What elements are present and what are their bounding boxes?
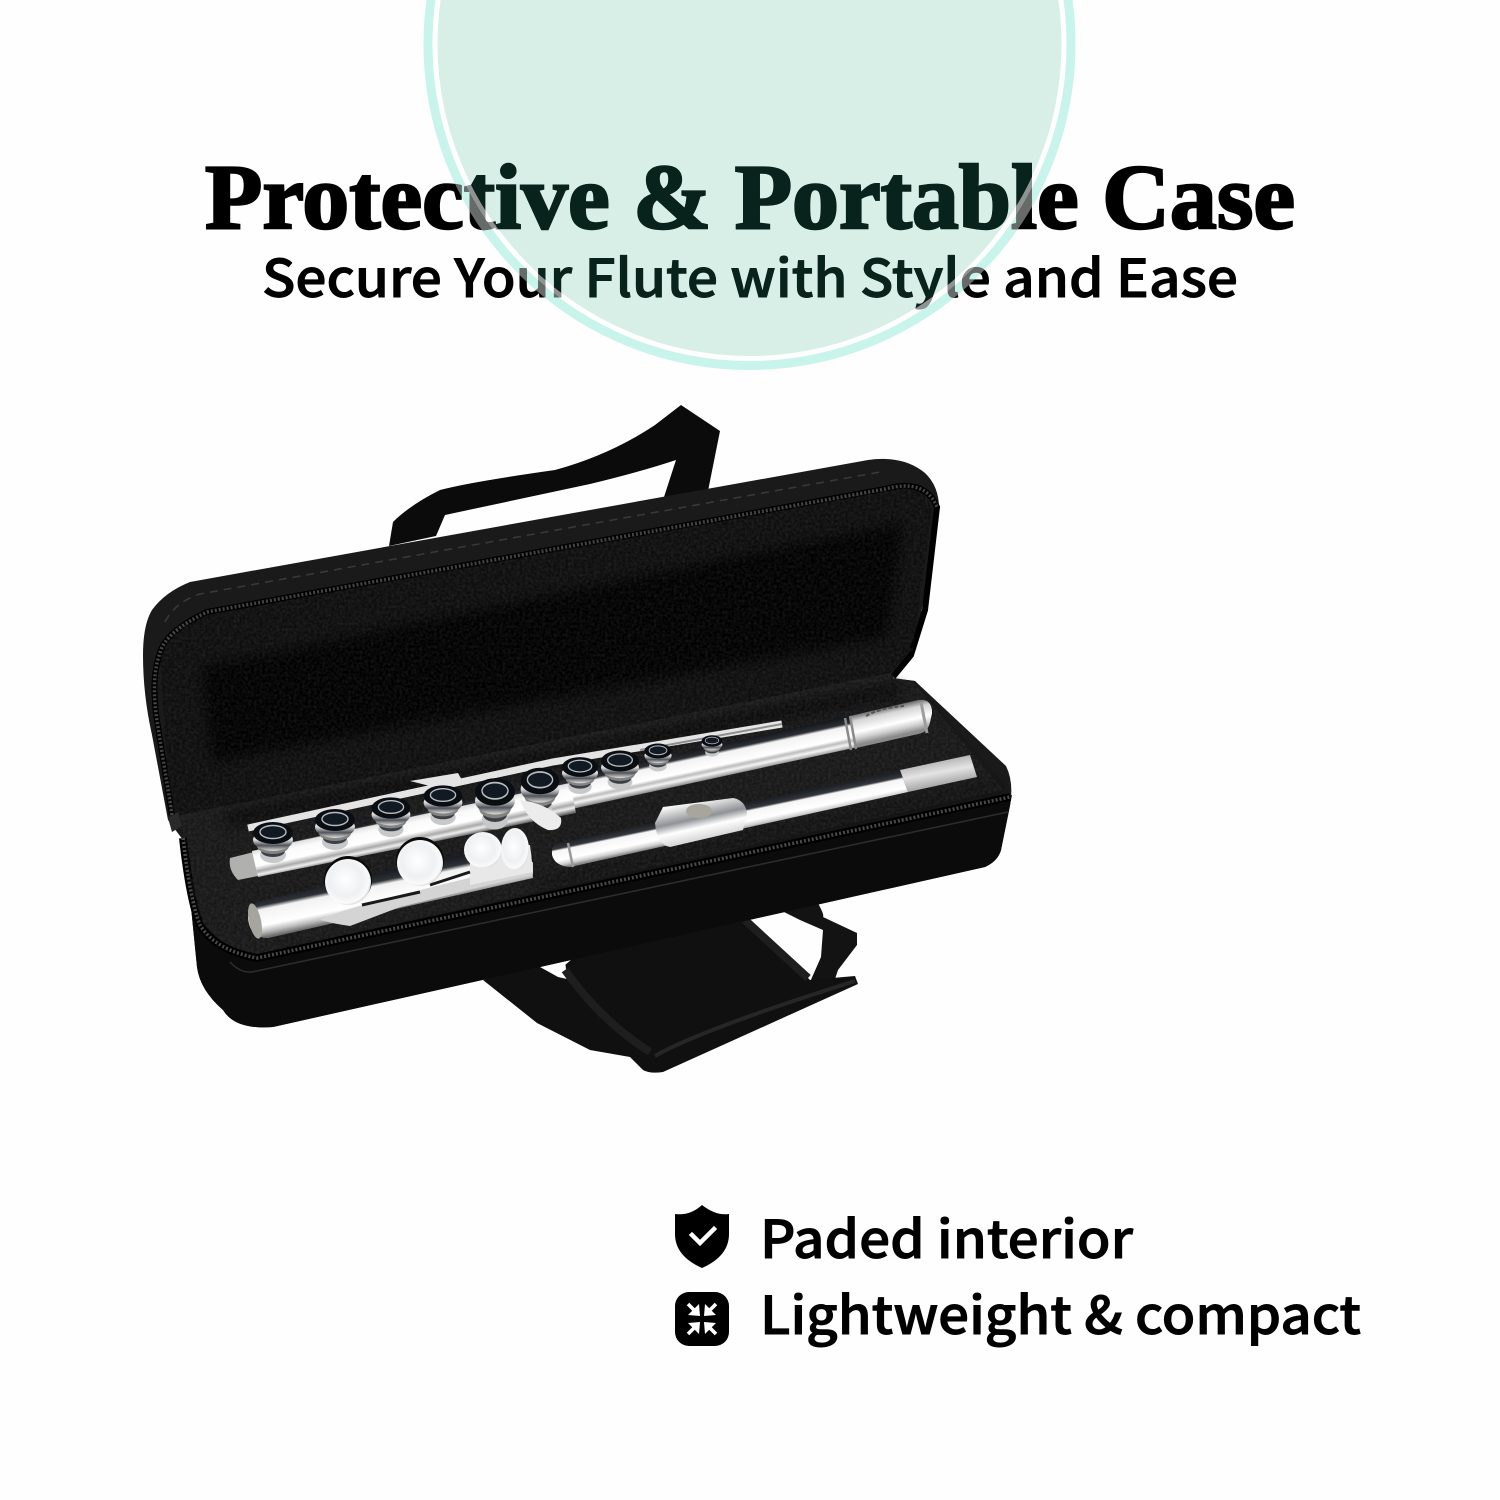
embouchure hole bbox=[686, 804, 712, 818]
key mechanism bbox=[320, 862, 533, 926]
upper flute body bbox=[230, 700, 932, 880]
base zipper bbox=[183, 797, 1010, 958]
flute case photo bbox=[140, 405, 1020, 1073]
icon: shield with check bbox=[675, 1205, 729, 1268]
lid lining bbox=[160, 488, 932, 815]
base lining grooves bbox=[225, 690, 1000, 885]
foot keys bbox=[324, 856, 372, 904]
icon: compress arrows bbox=[675, 1292, 729, 1346]
title: Protective & Portable Case bbox=[205, 146, 1295, 248]
feature: padded interior: Paded interior bbox=[760, 1198, 1134, 1273]
feature: lightweight and compact: Lightweight & compact bbox=[760, 1274, 1361, 1349]
tenon end bbox=[230, 852, 258, 880]
zipper pull bbox=[168, 812, 182, 832]
decorative mint circle bbox=[428, 0, 1071, 366]
key stack rod bbox=[248, 724, 782, 828]
lid recess bbox=[202, 523, 903, 762]
lid zipper bbox=[154, 486, 937, 815]
thumb lever bbox=[410, 773, 463, 786]
tenon bbox=[900, 755, 977, 792]
infographic canvas bbox=[143, 0, 1361, 1348]
barrel section bbox=[850, 700, 932, 748]
engraved logo bbox=[866, 706, 904, 716]
lower strap and pad bbox=[483, 898, 858, 1073]
base seam bbox=[230, 812, 1008, 972]
lid stitching bbox=[165, 472, 880, 622]
black keys bbox=[253, 735, 722, 863]
case body bbox=[143, 459, 1011, 1027]
main tube bbox=[252, 700, 932, 877]
foot joint bbox=[245, 828, 533, 940]
bright lower section bbox=[252, 783, 576, 877]
feature list bbox=[675, 1198, 1361, 1349]
base front band bbox=[190, 795, 1012, 1027]
subtitle: Secure Your Flute with Style and Ease bbox=[262, 237, 1238, 312]
fabric texture bbox=[160, 488, 1002, 954]
base lining bbox=[180, 678, 1006, 957]
top carry handle bbox=[389, 405, 720, 546]
crown ring bbox=[568, 843, 573, 867]
lip plate bbox=[655, 798, 747, 847]
head joint bbox=[552, 755, 977, 867]
